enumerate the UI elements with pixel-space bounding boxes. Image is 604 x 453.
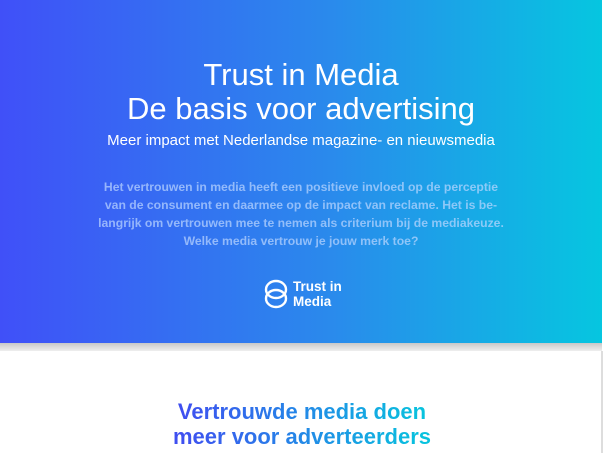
title: De basis voor advertising (127, 91, 475, 126)
logo: Media (293, 294, 331, 309)
intro paragraph: Het vertrouwen in media heeft een positieve invloed op de perceptie (104, 180, 498, 194)
logo: Trust in (293, 279, 342, 294)
intro paragraph: langrijk om vertrouwen mee te nemen als criterium bij de mediakeuze. (98, 216, 504, 230)
section heading: Vertrouwde media doen (178, 399, 426, 424)
intro paragraph: van de consument en daarmee op de impact van reclame. Het is be- (105, 198, 497, 212)
section heading: meer voor adverteerders (173, 424, 431, 449)
title (127, 57, 475, 126)
section heading (0, 399, 604, 449)
title: Trust in Media (203, 57, 399, 92)
intro paragraph: Welke media vertrouw je jouw merk toe? (184, 234, 418, 248)
intro paragraph (98, 180, 504, 248)
icon: rings (264, 280, 288, 308)
subtitle: Meer impact met Nederlandse magazine- en nieuwsmedia (107, 132, 495, 149)
hero banner (0, 0, 602, 343)
logo (264, 279, 342, 309)
